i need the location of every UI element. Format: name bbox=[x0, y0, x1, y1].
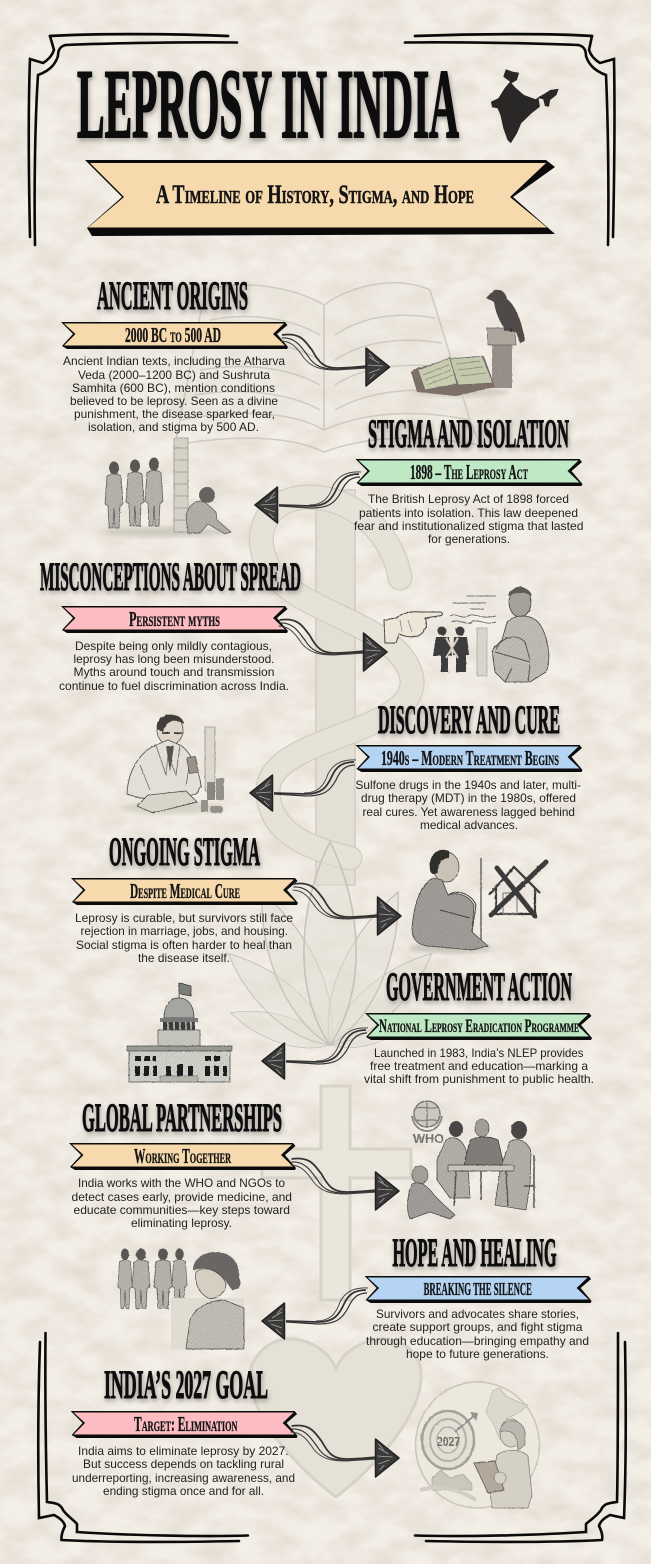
arrow bbox=[262, 1288, 368, 1339]
ribbon bbox=[356, 459, 582, 486]
body text: rejection in marriage, jobs, and housing. bbox=[80, 924, 288, 938]
body text: India works with the WHO and NGOs to bbox=[78, 1176, 285, 1190]
body text: Veda (2000–1200 BC) and Sushruta bbox=[78, 368, 270, 382]
section: global partnerships: GLOBAL PARTNERSHIPS bbox=[82, 1095, 282, 1140]
body text: underreporting, increasing awareness, and bbox=[72, 1471, 295, 1485]
ribbon bbox=[356, 745, 582, 772]
body text bbox=[354, 492, 584, 546]
ribbon bbox=[61, 606, 288, 633]
body text bbox=[63, 354, 285, 434]
ribbon label: Working Together bbox=[134, 1144, 231, 1168]
body text: Survivors and advocates share stories, bbox=[376, 1307, 579, 1321]
body text: But success depends on tackling rural bbox=[83, 1457, 284, 1471]
watermark: cross bbox=[262, 1086, 411, 1300]
ribbon bbox=[71, 1411, 298, 1438]
body text: through education—bringing empathy and bbox=[366, 1334, 589, 1348]
body text bbox=[72, 1444, 295, 1498]
arrow bbox=[262, 1028, 368, 1079]
subtitle banner bbox=[85, 160, 555, 236]
body text: create support groups, and fight stigma bbox=[372, 1320, 583, 1334]
body text: eliminating leprosy. bbox=[131, 1216, 232, 1230]
illustration: book, pillar and crow bbox=[410, 290, 525, 397]
body text: patients into isolation. This law deepened bbox=[359, 506, 578, 520]
body text: educate communities—key steps toward bbox=[74, 1203, 290, 1217]
body text bbox=[72, 1176, 292, 1230]
body text: Launched in 1983, India’s NLEP provides bbox=[374, 1046, 584, 1060]
body text: Social stigma is often harder to heal than bbox=[76, 938, 292, 952]
decorative frame: top bbox=[29, 34, 614, 245]
body text: Samhita (600 BC), mention conditions bbox=[72, 381, 275, 395]
illustration: parliament building bbox=[127, 983, 232, 1082]
body text: punishment, the disease sparked fear, bbox=[74, 407, 275, 421]
body text: Ancient Indian texts, including the Atharva bbox=[63, 354, 285, 368]
section: ongoing stigma bbox=[71, 829, 546, 965]
body text: the disease itself. bbox=[138, 951, 230, 965]
illustration: WHO meeting: WHO bbox=[413, 1131, 444, 1146]
section: global partnerships bbox=[69, 1095, 534, 1230]
ribbon bbox=[365, 1276, 592, 1303]
arrow bbox=[255, 472, 361, 523]
body text: free treatment and education—marking a bbox=[370, 1059, 588, 1073]
body text: Sulfone drugs in the 1940s and later, multi- bbox=[356, 778, 581, 792]
section: ancient origins: ANCIENT ORIGINS bbox=[97, 273, 248, 318]
decorative frame: bottom bbox=[38, 1333, 626, 1542]
subtitle text: A Timeline of History, Stigma, and Hope bbox=[156, 180, 474, 209]
arrow bbox=[292, 883, 401, 935]
body text: Leprosy is curable, but survivors still face bbox=[75, 911, 293, 925]
illustration: isolated woman and crossed-out house bbox=[408, 850, 546, 953]
ribbon bbox=[69, 1143, 296, 1170]
section: india's 2027 goal bbox=[71, 1362, 539, 1508]
body text: hope to future generations. bbox=[406, 1347, 549, 1361]
illustration: pointing hand and isolated man bbox=[384, 587, 549, 682]
section: government action bbox=[127, 964, 594, 1086]
illustration: support group and woman bbox=[118, 1249, 244, 1349]
body text: real cures. Yet awareness lagged behind bbox=[362, 805, 575, 819]
section: india's 2027 goal: INDIA’S 2027 GOAL bbox=[104, 1362, 268, 1407]
section: discovery and cure bbox=[120, 697, 582, 832]
body text: drug therapy (MDT) in the 1980s, offered bbox=[361, 791, 576, 805]
ribbon bbox=[365, 1013, 592, 1040]
illustration: 2027 target and health worker: 2027 bbox=[437, 1434, 460, 1449]
watermark: heart bbox=[250, 1339, 421, 1497]
ribbon label: Target: Elimination bbox=[134, 1412, 238, 1436]
watermark: lotus bbox=[217, 842, 443, 1058]
section: hope and healing: BREAKING THE SILENCE bbox=[424, 1279, 532, 1299]
ribbon bbox=[61, 322, 288, 349]
body text: Despite being only mildly contagious, bbox=[75, 639, 272, 653]
body text: continue to fuel discrimination across India. bbox=[59, 679, 289, 693]
body text bbox=[364, 1046, 594, 1086]
section: stigma and isolation bbox=[103, 411, 584, 546]
body text: The British Leprosy Act of 1898 forced bbox=[368, 492, 569, 506]
section: hope and healing bbox=[118, 1230, 592, 1361]
section: misconceptions about spread bbox=[40, 554, 549, 693]
icon: map of India bbox=[491, 69, 559, 143]
watermark: open book bbox=[175, 283, 480, 452]
illustration: 2027 target and health worker bbox=[416, 1382, 540, 1508]
watermark: rod of asclepius bbox=[261, 490, 412, 885]
body text bbox=[75, 911, 293, 965]
arrow bbox=[290, 1158, 399, 1210]
arrow bbox=[290, 1425, 399, 1477]
body text: isolation, and stigma by 500 AD. bbox=[88, 420, 259, 434]
body text: leprosy has long been misunderstood. bbox=[74, 652, 274, 666]
ribbon label: 1898 – The Leprosy Act bbox=[410, 460, 528, 484]
illustration: doctor with medicine bbox=[120, 715, 224, 814]
body text: medical advances. bbox=[420, 818, 518, 832]
illustration: people beside a wall bbox=[103, 438, 231, 537]
ribbon label: Despite Medical Cure bbox=[130, 879, 240, 903]
illustration: WHO meeting bbox=[408, 1101, 534, 1219]
ribbon label: Persistent myths bbox=[129, 607, 220, 631]
body text bbox=[366, 1307, 589, 1361]
ribbon label: 2000 BC to 500 AD bbox=[125, 323, 221, 347]
section: ongoing stigma: ONGOING STIGMA bbox=[109, 829, 260, 874]
arrow bbox=[281, 334, 390, 386]
arrow bbox=[278, 619, 387, 671]
section: ancient origins bbox=[61, 273, 525, 434]
body text: fear and institutionalized stigma that lasted bbox=[354, 519, 584, 533]
ribbon bbox=[71, 878, 298, 905]
body text: Myths around touch and transmission bbox=[74, 665, 274, 679]
body text bbox=[59, 639, 289, 693]
arrow bbox=[250, 760, 356, 811]
body text: ending stigma once and for all. bbox=[103, 1484, 264, 1498]
body text: believed to be leprosy. Seen as a divine bbox=[70, 394, 278, 408]
body text: vital shift from punishment to public health. bbox=[364, 1072, 594, 1086]
body text: detect cases early, provide medicine, and bbox=[72, 1190, 292, 1204]
body text: India aims to eliminate leprosy by 2027. bbox=[78, 1444, 289, 1458]
body text: for generations. bbox=[428, 532, 510, 546]
body text bbox=[356, 778, 581, 832]
